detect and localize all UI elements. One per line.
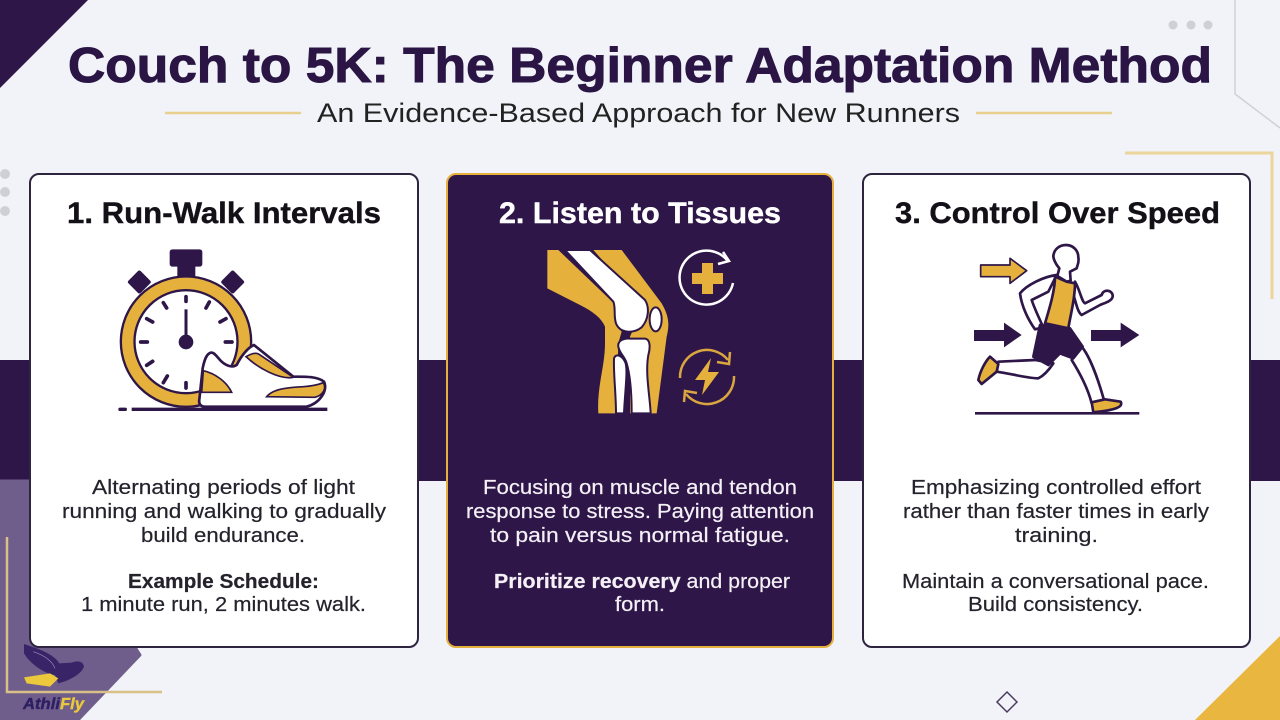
- gold bracket: top right: [1125, 153, 1272, 299]
- recovery note: [494, 571, 790, 616]
- panel: control over speed: [863, 174, 1250, 647]
- icon: winged foot: [24, 644, 84, 687]
- translucent shape: bottom left: [0, 481, 140, 720]
- description: speed: Emphasizing controlled effort: [911, 477, 1201, 499]
- heading: listen to tissues: 2. Listen to Tissues: [499, 197, 781, 230]
- pacing note: Maintain a conversational pace.: [902, 571, 1209, 593]
- arrow: gold: [981, 258, 1027, 283]
- icon: recovery plus: [680, 251, 733, 305]
- description: tissues: [466, 477, 814, 547]
- icon: energy cycle: [680, 350, 734, 404]
- diamond marker: [997, 692, 1017, 712]
- recovery note: form.: [615, 594, 665, 616]
- heading: control over speed: 3. Control Over Speed: [895, 197, 1220, 230]
- recovery note: Prioritize recovery and proper: [494, 571, 790, 593]
- icon: stopwatch and shoe: [120, 249, 327, 409]
- description: tissues: to pain versus normal fatigue.: [490, 525, 790, 547]
- arrow: dark right: [1091, 323, 1139, 347]
- description: speed: rather than faster times in early: [903, 501, 1209, 523]
- corner triangle: bottom right: [1195, 636, 1280, 720]
- corner triangle: top left: [0, 0, 88, 88]
- arrow: dark left: [974, 323, 1022, 347]
- background band: [0, 360, 1280, 481]
- corner lines: top right: [1235, 0, 1280, 128]
- runner figure: [978, 245, 1121, 412]
- description: speed: [903, 477, 1209, 547]
- example schedule: 1 minute run, 2 minutes walk.: [81, 594, 366, 616]
- pacing note: Build consistency.: [968, 594, 1143, 616]
- decorative dots: left: [0, 169, 10, 216]
- panel: listen to tissues: [447, 174, 833, 647]
- gold bracket: bottom left: [7, 537, 162, 692]
- decorative dots: top right: [1168, 20, 1212, 30]
- subtitle: An Evidence-Based Approach for New Runners: [317, 98, 960, 128]
- description: tissues: Focusing on muscle and tendon: [483, 477, 797, 499]
- panel: run-walk intervals: [30, 174, 418, 647]
- logo: AthliFly: [22, 644, 85, 713]
- wordmark: AthliFly: [22, 696, 85, 713]
- description: run-walk: Alternating periods of light: [92, 477, 356, 499]
- description: tissues: response to stress. Paying attention: [466, 501, 814, 523]
- description: run-walk: [62, 477, 386, 547]
- description: speed: training.: [1015, 525, 1098, 547]
- icon: knee joint: [547, 250, 668, 413]
- icon: runner with arrows: [974, 245, 1139, 413]
- pacing note: [902, 571, 1209, 616]
- heading: run-walk intervals: 1. Run-Walk Intervals: [67, 197, 381, 230]
- description: run-walk: running and walking to gradually: [62, 501, 386, 523]
- description: run-walk: build endurance.: [141, 525, 305, 547]
- title: Couch to 5K: The Beginner Adaptation Method: [68, 39, 1212, 93]
- example schedule: Example Schedule:: [128, 571, 319, 593]
- example schedule: [81, 571, 366, 616]
